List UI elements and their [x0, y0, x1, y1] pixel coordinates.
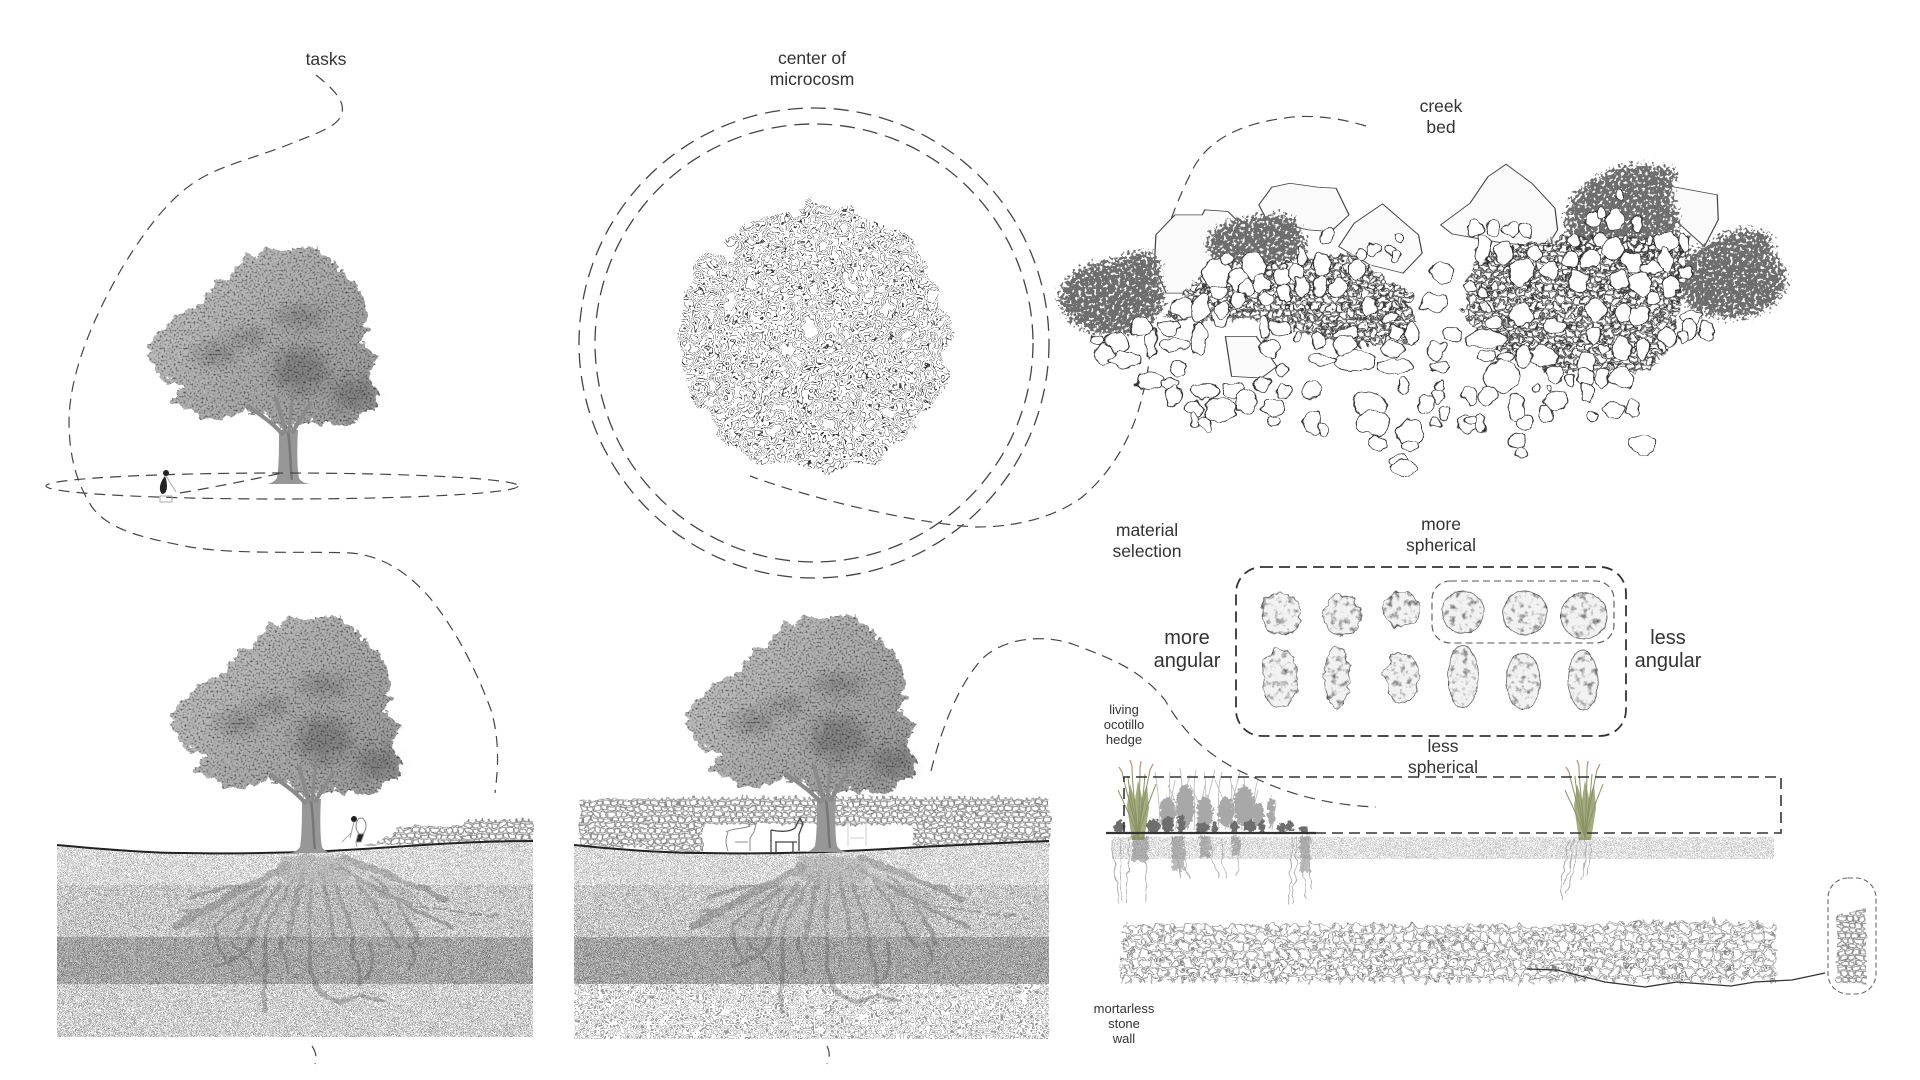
label: mortarless stone wall: wall — [1112, 1031, 1135, 1046]
label: mortarless stone wall: stone — [1108, 1016, 1140, 1031]
label: more angular: more — [1164, 627, 1210, 649]
panel: creek bed — [1051, 96, 1794, 476]
dashed route from canopy to creek bed — [750, 116, 1366, 527]
dense root clusters — [1132, 836, 1310, 872]
ground line — [57, 841, 533, 853]
hedge soil band — [1112, 837, 1774, 859]
heading: material selection: selection — [1112, 541, 1182, 561]
label: less spherical: less — [1427, 736, 1459, 756]
label: mortarless stone wall: mortarless — [1094, 1001, 1154, 1016]
pale boulders — [1154, 164, 1718, 378]
label: more angular: angular — [1154, 650, 1221, 672]
tree canopy plan drawing — [679, 206, 949, 472]
outer dashed circle — [579, 108, 1049, 578]
tree roots — [693, 855, 1019, 1012]
goat center — [771, 818, 803, 853]
label: more spherical: more — [1421, 514, 1461, 534]
dashed root extension — [827, 1046, 829, 1064]
label: more spherical: spherical — [1406, 535, 1476, 555]
dashed wall section frame — [1828, 878, 1876, 994]
heading: center of microcosm: center of — [778, 48, 846, 68]
label: less angular: less — [1650, 627, 1686, 649]
dashed root extension — [312, 1046, 316, 1064]
stone wall with opening — [580, 796, 1050, 853]
tree roots — [176, 855, 502, 1012]
ground line — [574, 841, 1049, 853]
panel: material selection — [1112, 514, 1702, 777]
dense stone beds — [1164, 237, 1689, 373]
panel: center of microcosm — [579, 48, 1366, 578]
icon: person carrying load — [342, 816, 366, 847]
goat left — [726, 820, 756, 851]
creek stones — [1092, 192, 1715, 476]
heading: material selection: material — [1116, 520, 1178, 540]
panel: tasks — [46, 49, 518, 793]
task path line from worker to tree — [180, 473, 282, 493]
goat right — [846, 822, 866, 846]
heading: creek bed: creek — [1420, 96, 1462, 116]
label: living ocotillo hedge: hedge — [1106, 732, 1142, 747]
panel: living ocotillo hedge — [1104, 702, 1781, 903]
tree — [684, 615, 918, 852]
dashed route from section to hedge — [931, 639, 1376, 807]
roots under hedge — [1112, 838, 1591, 903]
tree with worker — [146, 247, 380, 484]
ocotillo right — [1565, 760, 1603, 840]
gray reeds — [1155, 768, 1276, 830]
orbit ellipse — [46, 473, 518, 499]
stone wall elevation — [1119, 919, 1776, 983]
stone wall section — [1835, 908, 1868, 983]
icon: person working — [160, 470, 176, 502]
low shrubs — [1114, 814, 1309, 834]
dashed hedge extent — [1124, 777, 1781, 833]
mid gray plants — [1160, 784, 1274, 828]
ground line — [1106, 832, 1316, 834]
label: less angular: angular — [1635, 650, 1702, 672]
rocks: elongated row — [1262, 646, 1598, 710]
ocotillo left — [1118, 760, 1156, 840]
tree — [169, 616, 403, 853]
panel: mortarless stone wall — [1094, 878, 1876, 1046]
soil layers — [50, 840, 540, 1039]
shrubs — [1051, 157, 1794, 343]
heading: creek bed: bed — [1426, 117, 1456, 137]
rubble stone mound — [363, 819, 533, 846]
outer dashed frame — [1236, 567, 1626, 736]
label: living ocotillo hedge: living — [1109, 702, 1139, 717]
panel: section with stone wall and goats — [570, 615, 1376, 1064]
heading: center of microcosm: microcosm — [770, 69, 854, 89]
selected rocks frame — [1432, 581, 1614, 643]
rocks: angular row — [1261, 591, 1607, 639]
label: living ocotillo hedge: ocotillo — [1104, 717, 1144, 732]
label: less spherical: spherical — [1408, 757, 1478, 777]
heading: tasks: tasks — [306, 49, 347, 69]
inner dashed circle — [595, 124, 1033, 562]
soil layers — [570, 840, 1055, 1039]
panel: tree section with soil and rubble — [50, 616, 540, 1064]
dashed route from tasks to section — [69, 75, 498, 793]
section pointer line — [1527, 969, 1825, 987]
